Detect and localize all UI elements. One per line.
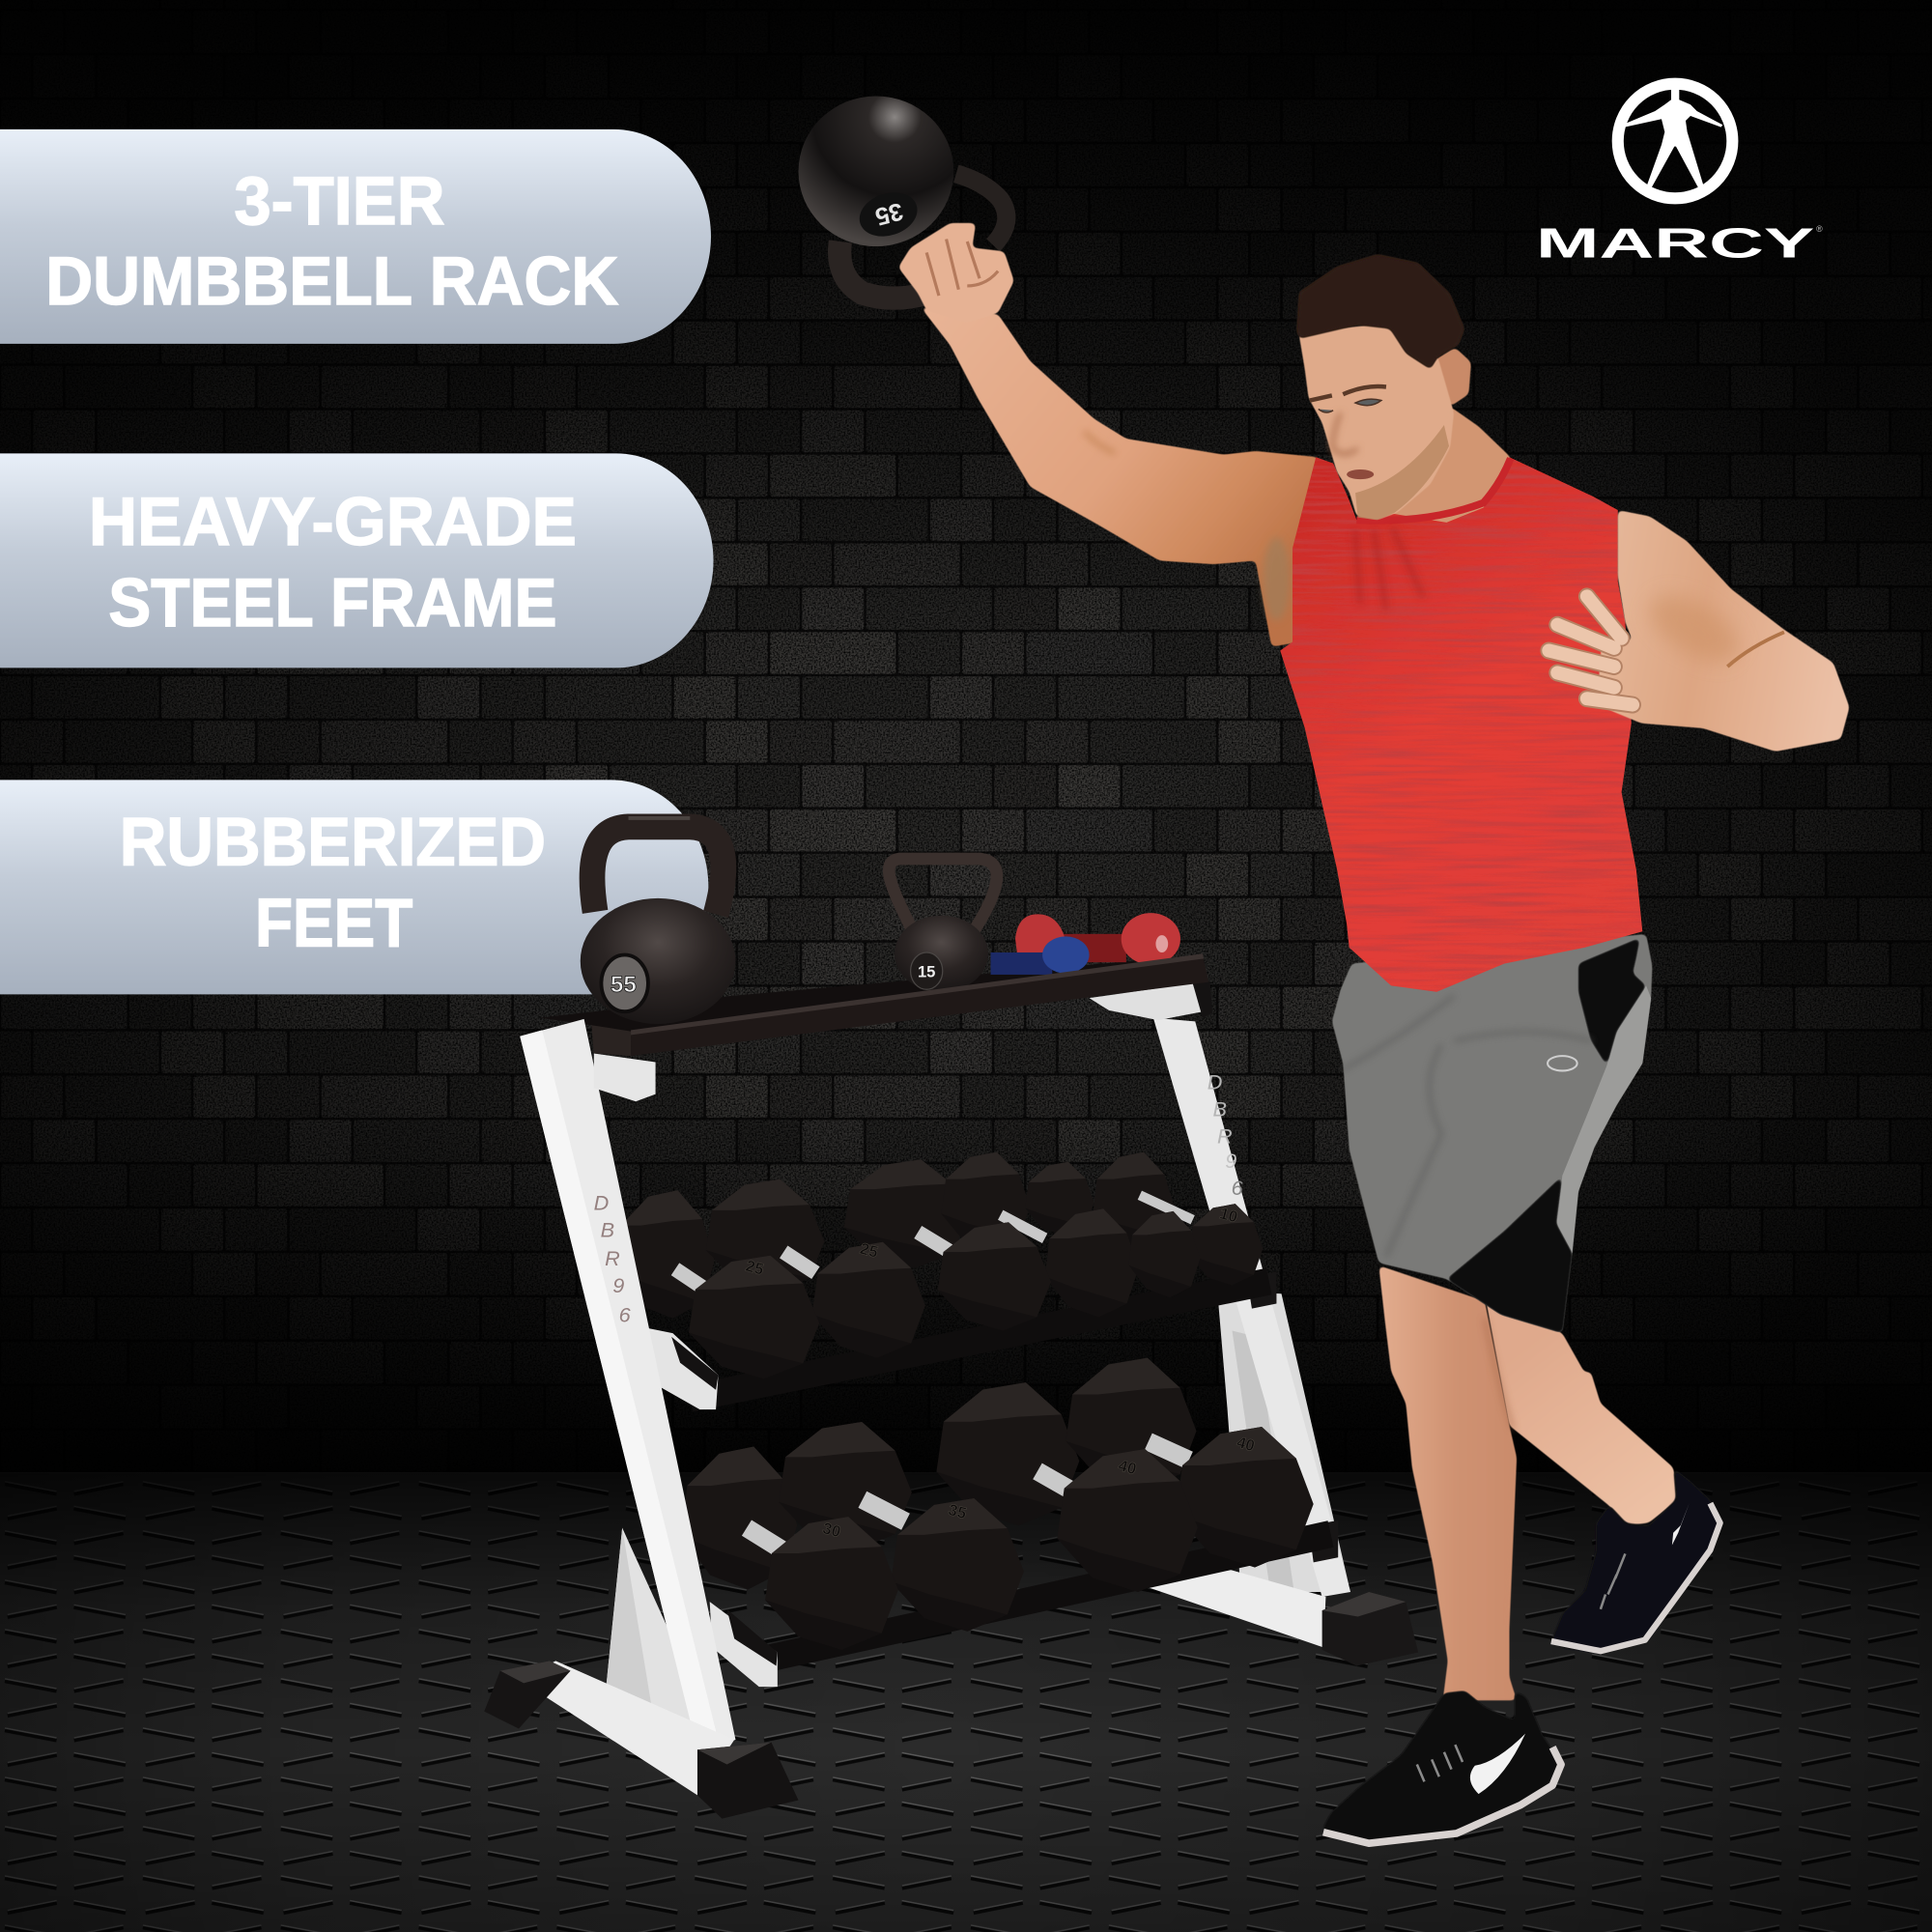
- kettlebell: 35 overhead: [799, 96, 1007, 298]
- weight label: 15: [918, 962, 935, 980]
- face: [1298, 323, 1454, 520]
- rack rear upright: B: [1213, 1097, 1227, 1122]
- logo: Marcy: [1536, 84, 1823, 268]
- rack front upright: D: [594, 1191, 609, 1215]
- armpit shading: [1263, 537, 1290, 621]
- wordmark: MARCY: [1536, 221, 1814, 268]
- arm crease: [1727, 632, 1784, 667]
- lower tier dumbbells: 35: [947, 1500, 969, 1522]
- small neoprene dumbbells: [991, 913, 1180, 975]
- kettlebell: 15: [889, 859, 997, 992]
- lower tier dumbbells: 40: [1117, 1456, 1139, 1478]
- lower tier dumbbells: 30: [821, 1519, 842, 1541]
- back shoe: [1551, 1467, 1722, 1654]
- fold lines: [1343, 996, 1592, 1257]
- black lower panel: [1446, 1176, 1573, 1333]
- knee shading: [1485, 1319, 1513, 1430]
- athlete: [799, 96, 1850, 1844]
- heading line: FEET: FEET: [255, 885, 412, 961]
- elbow crease: [1084, 431, 1115, 453]
- fist: [898, 223, 1014, 323]
- heading line: RUBBERIZED: RUBBERIZED: [120, 803, 546, 879]
- rack rear upright: D: [1208, 1070, 1222, 1094]
- rack rear upright: [1148, 1018, 1418, 1665]
- panel: 3-tier dumbbell rack: [0, 129, 711, 344]
- shirt neck band: [1356, 458, 1511, 521]
- raised arm: [921, 307, 1319, 647]
- tread plate floor: [0, 1472, 1932, 1932]
- weight label: 55: [611, 972, 637, 998]
- finger outlines: [1548, 596, 1633, 705]
- rear arm and hand: [1548, 510, 1850, 752]
- rack front upright: [484, 1019, 799, 1819]
- rack front upright: 6: [619, 1303, 632, 1327]
- fingers: [1548, 596, 1633, 705]
- head: [1296, 254, 1471, 520]
- black upper panel: [1578, 938, 1646, 1065]
- icon: vitruvian figure: [1625, 89, 1722, 188]
- nose shadow: [1333, 412, 1358, 454]
- stubble: [1355, 425, 1449, 520]
- upper tier dumbbells: 25: [744, 1257, 766, 1279]
- rack rear upright: 9: [1225, 1149, 1236, 1173]
- shorts logo: [1548, 1056, 1577, 1070]
- hair: [1296, 254, 1465, 370]
- bicep shading: [1639, 582, 1749, 674]
- kettlebell: 55: [581, 818, 735, 1024]
- rack top tray interior: [540, 955, 1203, 1033]
- mouth: [1347, 469, 1374, 479]
- ear: [1430, 348, 1471, 407]
- red shirt: [1280, 457, 1642, 992]
- upper tier dumbbells: 10: [1218, 1204, 1239, 1227]
- heading line: 3-TIER: 3-TIER: [234, 162, 444, 239]
- dumbbell rack: [484, 953, 1418, 1819]
- rack rear upright: R: [1217, 1124, 1233, 1149]
- upper tier dumbbells: [616, 1152, 1263, 1378]
- upper tier dumbbells: 25: [858, 1239, 880, 1262]
- brick wall background: [0, 0, 1932, 1479]
- heading line: DUMBBELL RACK: DUMBBELL RACK: [45, 242, 618, 319]
- weight label: 35: [872, 197, 906, 230]
- light outer panel: [1556, 985, 1651, 1253]
- rack top tray front: [591, 953, 1212, 1101]
- shorts: [1332, 934, 1652, 1333]
- rack front upright: 9: [612, 1273, 624, 1297]
- panel: rubberized feet: [0, 780, 708, 994]
- rack rear upright: 6: [1232, 1176, 1244, 1200]
- eyes: [1319, 399, 1381, 412]
- rack cross bars: [690, 1282, 1331, 1663]
- front shoe: [1322, 1690, 1562, 1844]
- shirt folds: [1355, 527, 1423, 610]
- lower tier dumbbells: 40: [1235, 1433, 1257, 1455]
- rack front upright: R: [605, 1246, 620, 1270]
- registered mark: ®: [1816, 224, 1823, 234]
- back leg: [1485, 1293, 1678, 1525]
- panel: heavy-grade steel frame: [0, 453, 714, 668]
- heading line: HEAVY-GRADE: HEAVY-GRADE: [89, 483, 577, 559]
- eyebrows: [1310, 386, 1386, 401]
- heading line: STEEL FRAME: STEEL FRAME: [108, 564, 557, 640]
- neck: [1380, 407, 1518, 527]
- front leg: [1378, 1265, 1517, 1700]
- lower tier dumbbells: [681, 1358, 1314, 1650]
- rack front upright: B: [601, 1218, 614, 1242]
